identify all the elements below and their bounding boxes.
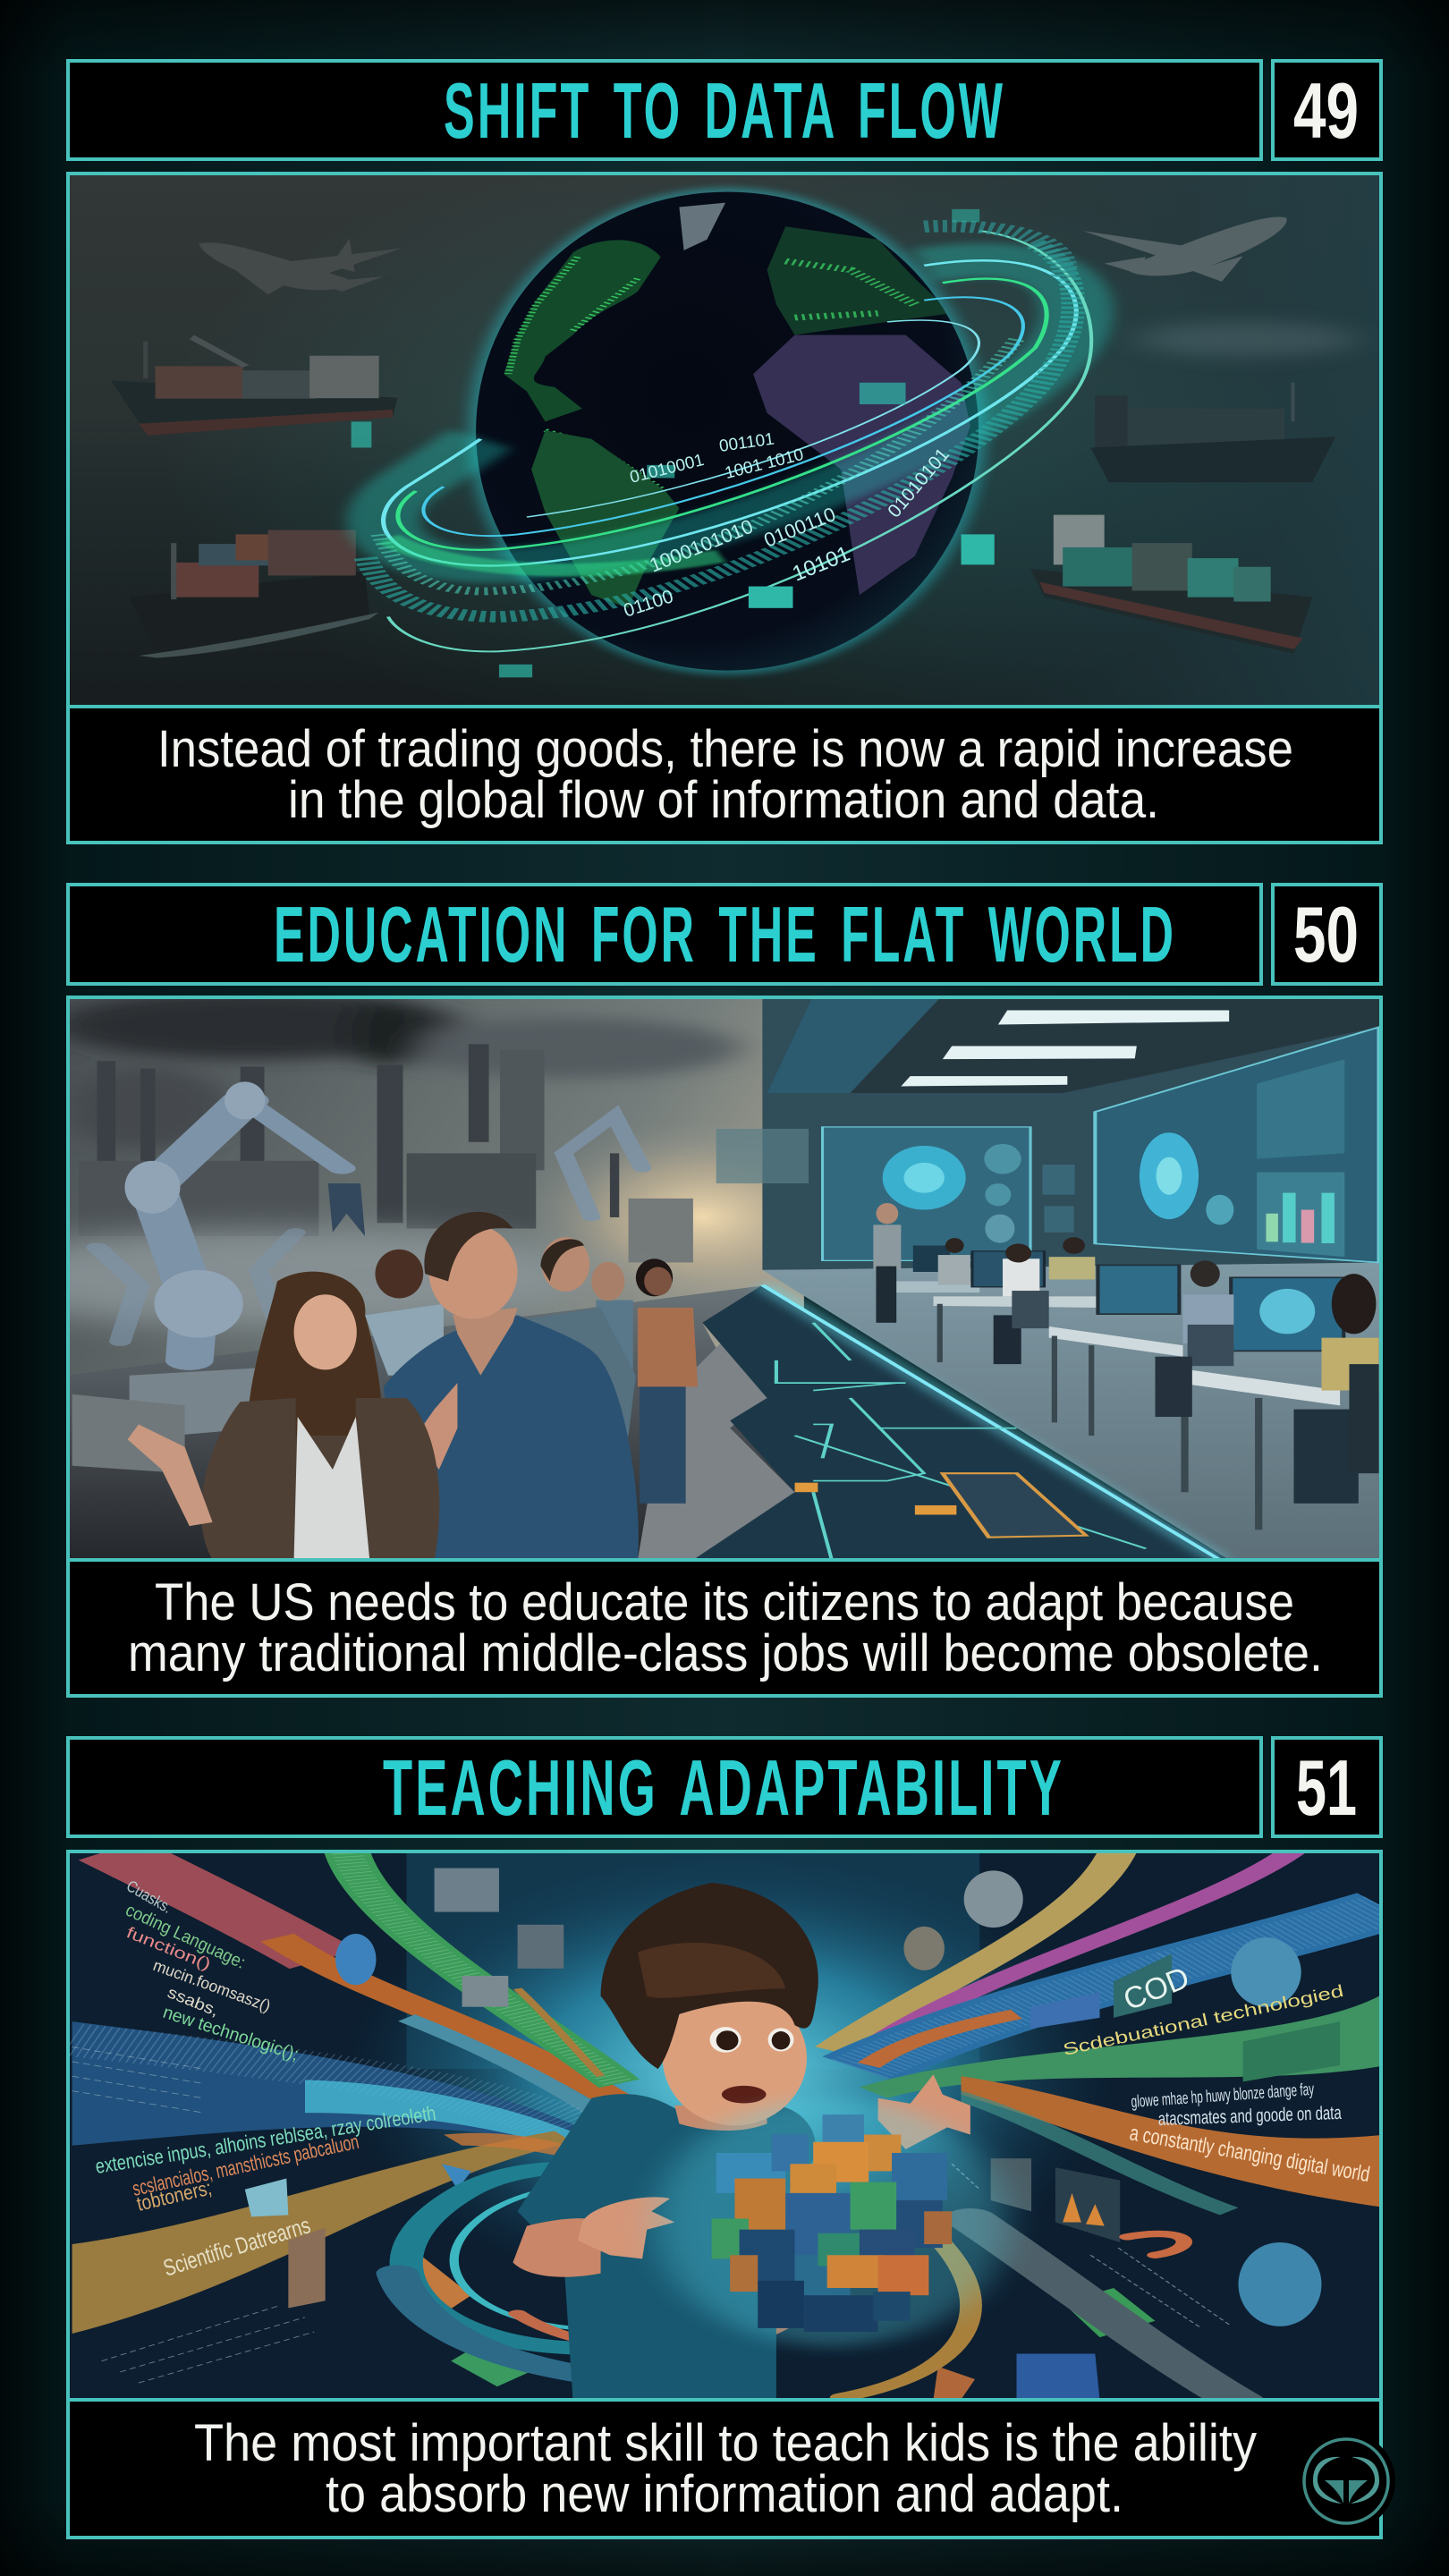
factory chimneys (79, 1044, 693, 1262)
caption box 51 (68, 2400, 1381, 2538)
caption box 51: to absorb new information and adapt. (326, 2465, 1123, 2523)
caption box 50 (68, 1560, 1381, 1696)
ribbon and code text: glowe mhae hp huwy blonze dange fay (1131, 2080, 1315, 2112)
ribbon and code text: a constantly changing digital world (1128, 2121, 1372, 2187)
ship upper left (111, 335, 397, 436)
binary text on rings: 1000101010 (647, 515, 756, 577)
dark clouds (55, 991, 740, 1149)
number badge 51 (1273, 1738, 1381, 1836)
binary text on rings: 001101 (718, 430, 775, 456)
robot arm main (97, 1100, 642, 1360)
machine (72, 1394, 185, 1473)
caption box 49: in the global flow of information and data. (288, 771, 1159, 829)
caption box 49 (68, 707, 1381, 843)
ribbon and code text: tobtoners; (134, 2175, 214, 2216)
woman foreground (128, 1272, 439, 1560)
number badge 49: 49 (1293, 66, 1359, 155)
central glow (342, 1850, 1118, 2302)
panel: teaching adaptability (64, 1738, 1386, 2538)
small text blocks (72, 2047, 1229, 2383)
ribbons left (111, 1850, 647, 2142)
panel: shift to data flow (64, 61, 1386, 843)
image: factory and classroom (0, 991, 1386, 1560)
ribbon and code text: Scientific Datrearns (160, 2211, 313, 2282)
man foreground (384, 1212, 639, 1560)
ribbon and code text: mucin.foomsasz() (151, 1956, 273, 2015)
heading box: education (68, 885, 1261, 984)
ground (64, 1285, 795, 1560)
ribbon and code text: Scdebuational technologied (1062, 1982, 1345, 2060)
ribbon and code text: new technologic(); (160, 2003, 301, 2065)
ship lower right (1030, 515, 1312, 654)
ribbon and code text (94, 1877, 1372, 2282)
image: boy with cube and data ribbons (64, 1850, 1386, 2402)
binary text on rings: 01010101 (884, 445, 953, 521)
man dark (365, 1250, 444, 1376)
ribbon and code text: function() (124, 1923, 214, 1973)
caption box 49: Instead of trading goods, there is now a rapid increase (157, 720, 1293, 778)
continent: south america (531, 430, 679, 608)
ship lower left (130, 530, 379, 658)
floating cards (245, 1868, 1340, 2400)
caption box 50: The US needs to educate its citizens to adapt because (155, 1573, 1294, 1631)
boy head (601, 1883, 818, 2125)
globe (469, 188, 986, 674)
hologram screens (716, 1027, 1379, 1262)
image frame (68, 1852, 1381, 2400)
ribbons right (832, 1850, 1386, 2069)
continent: greenland (679, 203, 725, 250)
logo badge (1297, 2432, 1395, 2530)
continent: north america (504, 240, 661, 421)
ribbon and code text: extencise inpus, alhoins reblsea, rzay colreoleth (94, 2101, 437, 2178)
woman back right (636, 1258, 698, 1504)
binary text on rings: 01100 (621, 586, 676, 622)
image: globe with data rings (70, 175, 1379, 705)
ribbon and code text: atacsmates and goode on data (1157, 2103, 1342, 2130)
data tags (352, 209, 995, 677)
ribbon and code text: Cuasks. (123, 1877, 175, 1917)
data rings (365, 226, 1091, 651)
ribbon and code text: COD (1119, 1961, 1194, 2017)
ground fog (0, 1229, 601, 1326)
image frame (68, 174, 1381, 707)
ribbon and code text: scslancialos, mansthicsts pabcaluon (131, 2130, 360, 2200)
ship upper right (1090, 383, 1335, 482)
ceiling lights (901, 1010, 1229, 1086)
caption box 51: The most important skill to teach kids is the ability (194, 2414, 1257, 2472)
binary text on rings (621, 430, 953, 622)
number badge 50: 50 (1293, 890, 1359, 979)
heading box: teaching adaptability (68, 1738, 1261, 1836)
panel: education for the flat world (0, 885, 1386, 1696)
ribbon and code text: coding Language: (123, 1901, 249, 1973)
binary text on rings: 01010001 (628, 451, 706, 487)
continent: africa (753, 335, 970, 595)
caption box 50: many traditional middle-class jobs will become obsolete. (128, 1624, 1323, 1682)
horizon glow (518, 1120, 887, 1315)
ribbon and code text: ssabs, (165, 1983, 222, 2020)
icon: plane right (1083, 216, 1287, 282)
heading box: shift to data flow (68, 61, 1261, 159)
digital floor path (693, 1285, 1229, 1560)
binary text on rings: 0100110 (761, 503, 839, 552)
icon: plane left (199, 239, 402, 294)
swirl (397, 2168, 1238, 2402)
binary text on rings: 1001 1010 (723, 445, 806, 483)
man plaid (527, 1237, 636, 1436)
ceiling (767, 996, 1386, 1093)
room wall (762, 996, 1386, 1270)
classroom people (873, 1203, 1379, 1504)
cube (657, 2098, 1007, 2346)
number badge 51: 51 (1296, 1743, 1357, 1832)
heading box: shift to data flow: SHIFT TO DATA FLOW (444, 66, 1005, 155)
woman back (591, 1262, 633, 1376)
continent: eurasia (767, 226, 952, 335)
classroom desks and monitors (892, 1246, 1343, 1530)
coast lights (504, 256, 667, 491)
binary text on rings: 10101 (789, 542, 853, 587)
floor (762, 1262, 1386, 1560)
boy body (513, 2074, 970, 2402)
image frame (68, 997, 1381, 1560)
